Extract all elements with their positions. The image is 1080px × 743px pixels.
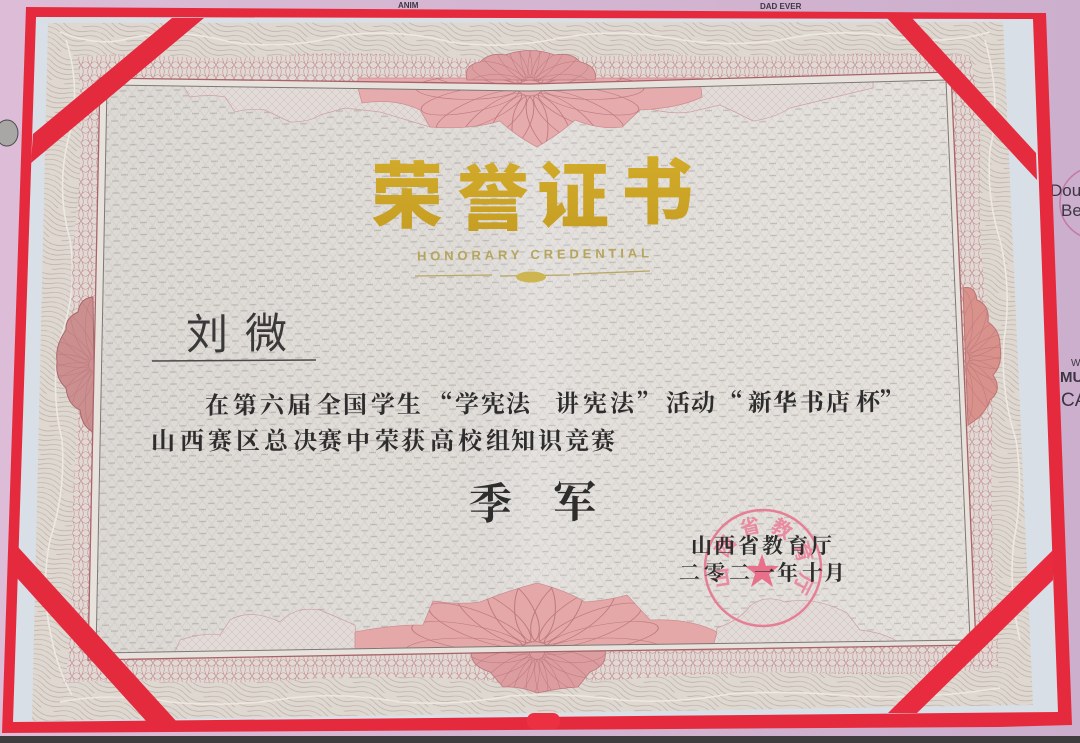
red seal stamp: 山西省教育厅 <box>711 516 814 596</box>
centre fold shading <box>96 80 970 653</box>
red corner ribbon: bottom right <box>888 550 1053 713</box>
red corner ribbon: top right <box>887 18 1037 180</box>
date: 二零二一年十月: 二零二一年十月 <box>679 557 845 587</box>
ornament: top centre rosette <box>358 50 702 148</box>
ornament: right side rosette <box>962 287 1002 426</box>
award: 季军: 季军 <box>469 469 596 532</box>
inner diamond-pattern field <box>96 80 970 653</box>
seal star <box>745 554 779 587</box>
doodle: top lettering right: DAD EVER <box>760 2 802 11</box>
name underline <box>152 360 316 361</box>
body text line 2: 山西赛区总决赛中荣获高校组知识竞赛 <box>151 421 617 456</box>
rosette upper part <box>466 50 595 80</box>
subtitle: HONORARY CREDENTIAL: HONORARY CREDENTIAL <box>417 245 649 264</box>
doodle: round ball left <box>0 120 18 146</box>
ornament: left side rosette <box>56 296 94 432</box>
rosette lower petals <box>472 652 605 692</box>
lace ornament: top right <box>620 82 873 127</box>
body text line 1: 在第六届全国学生“学宪法讲宪法”活动“新华书店杯” <box>205 382 903 421</box>
mesh band around frame <box>65 53 998 683</box>
ornament: bottom centre rosette <box>354 582 718 694</box>
red cover fold tab at bottom <box>527 713 560 729</box>
frame: pale strip with lines <box>88 72 976 660</box>
rosette upper petals <box>472 51 588 80</box>
seal ring text <box>727 532 799 586</box>
rosette lower part <box>471 650 605 693</box>
doodle: lettering lower right <box>1060 358 1080 411</box>
title: 荣誉证书: 荣誉证书 <box>371 134 693 245</box>
issuer: 山西省教育厅: 山西省教育厅 <box>691 530 832 560</box>
background doodles <box>0 1 1080 411</box>
rosette petals lower <box>416 78 644 144</box>
gold divider with knot <box>415 271 650 282</box>
right rosette petals <box>964 290 1000 420</box>
doodle: circled words <box>1050 167 1080 239</box>
red corner ribbon: top left <box>31 18 204 163</box>
doodle: top lettering: ANIM <box>398 1 419 10</box>
dark table strip at bottom <box>0 736 1080 743</box>
frame outer line <box>88 72 976 660</box>
rosette petals upper <box>406 587 659 648</box>
left rosette petals <box>56 298 94 432</box>
recipient name: 刘微: 刘微 <box>186 300 287 362</box>
lace ornament: bottom right <box>712 599 897 650</box>
lace ornament: bottom left <box>175 609 358 652</box>
frame inner line <box>96 80 970 653</box>
red corner ribbon: bottom left <box>17 547 177 722</box>
lace ornament: top left <box>182 84 430 127</box>
